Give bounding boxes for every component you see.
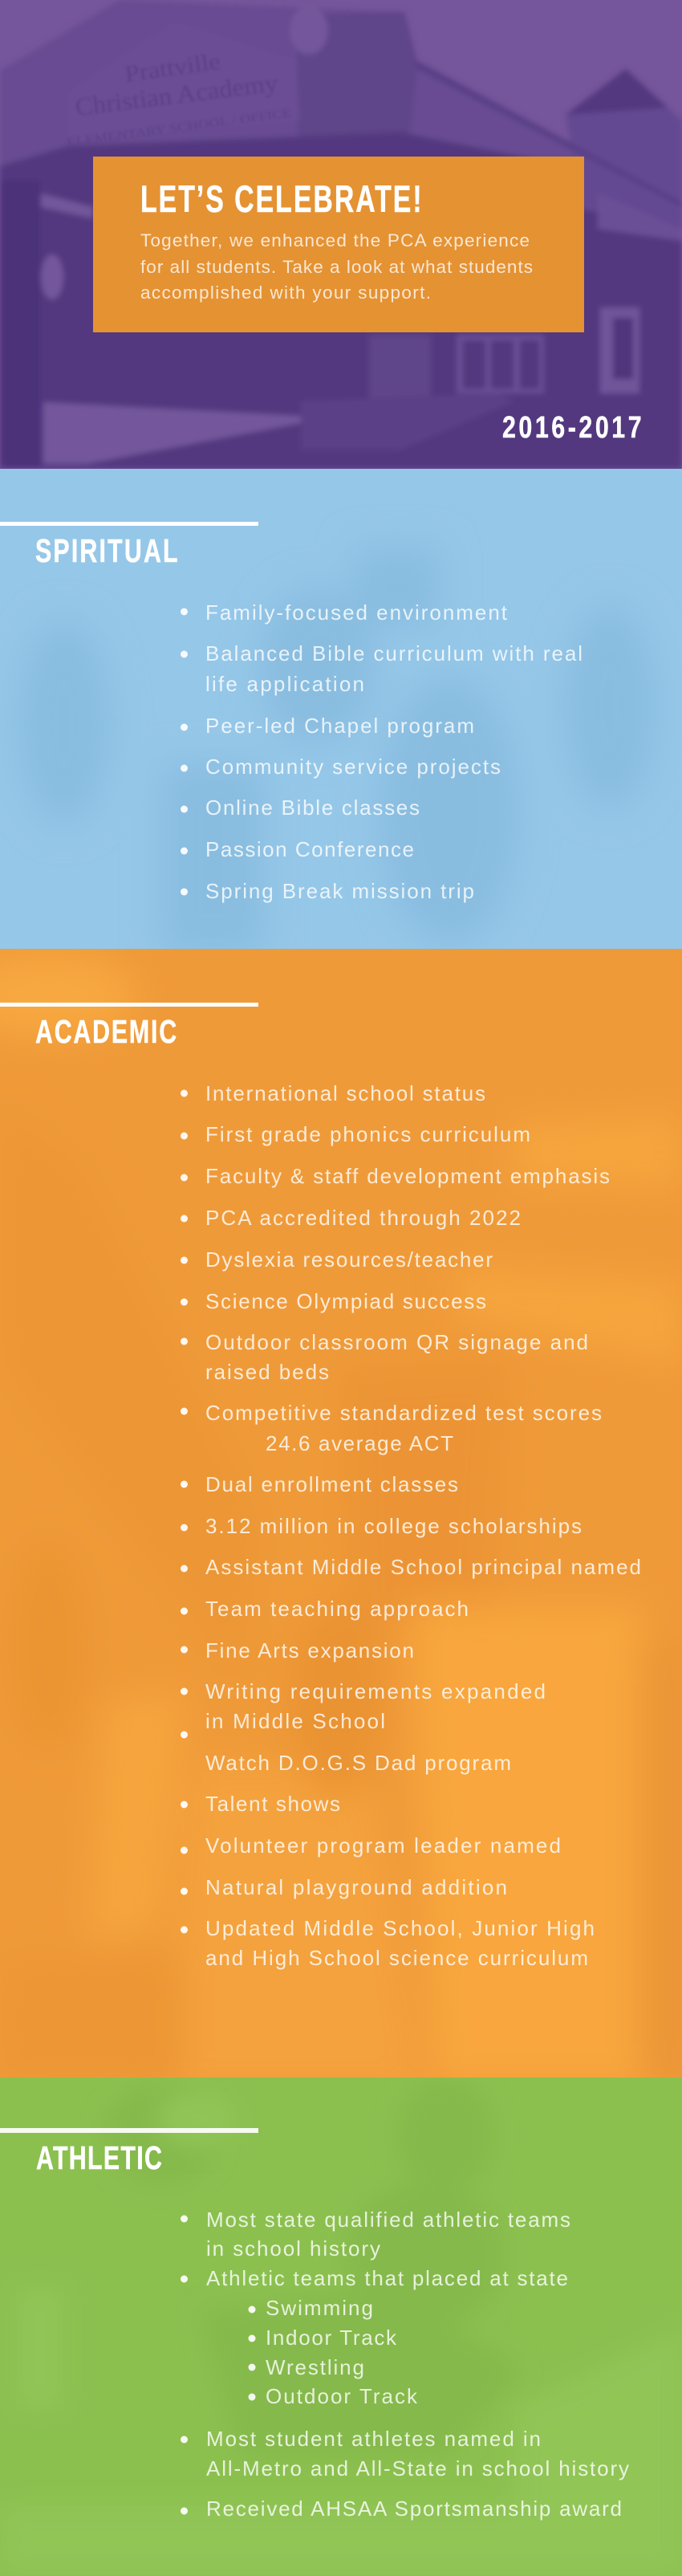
year label: 2016-2017	[502, 411, 642, 445]
list: spiritual items: Community service projects	[205, 755, 501, 779]
list: academic items: PCA accredited through 2022	[205, 1206, 521, 1230]
list: athletic items: Athletic teams that placed at state	[206, 2266, 568, 2290]
photo sign text	[69, 55, 286, 141]
list: academic items: Dyslexia resources/teacher	[205, 1247, 493, 1272]
photo sign text: ELEMENTARY SCHOOL / OFFICE	[66, 107, 292, 149]
photo: faded classroom in orange	[0, 955, 682, 2087]
panel: spiritual	[0, 469, 682, 955]
panel: athletic	[0, 2077, 682, 2576]
panel: academic	[0, 949, 682, 2087]
list: athletic items: in school history	[206, 2236, 380, 2261]
list: academic items: Dual enrollment classes	[205, 1472, 458, 1496]
list: academic items: 3.12 million in college scholarships	[205, 1514, 582, 1538]
photo sign text: Prattville	[124, 49, 222, 87]
list: spiritual items: Spring Break mission trip	[205, 879, 474, 903]
list: academic items: Natural playground addition	[205, 1875, 507, 1899]
photo: faded students in blue	[16, 546, 658, 955]
list: academic items	[181, 1081, 641, 1970]
list: academic items: Talent shows	[205, 1792, 340, 1816]
photo sign text: Christian Academy	[74, 68, 279, 121]
list: academic items: Assistant Middle School principal named	[205, 1555, 641, 1579]
panel: hero header	[0, 0, 682, 469]
list: academic items: Volunteer program leader named	[205, 1833, 561, 1858]
list: spiritual items: life application	[205, 672, 364, 696]
list: academic items: International school status	[205, 1081, 485, 1105]
callout: orange intro box	[93, 157, 584, 332]
list: academic items: Writing requirements expanded	[205, 1679, 546, 1703]
list: academic items: Team teaching approach	[205, 1597, 469, 1621]
intro text: Together, we enhanced the PCA experience	[140, 230, 530, 250]
list: athletic items: All-Metro and All-State in school history	[206, 2456, 629, 2480]
rule	[0, 2128, 258, 2133]
list: academic items: 24.6 average ACT	[266, 1431, 453, 1455]
photo: school building in purple duotone	[0, 0, 682, 469]
list: spiritual items: Balanced Bible curriculum with real	[205, 641, 583, 665]
list: academic items: Fine Arts expansion	[205, 1638, 414, 1662]
list: academic items: Updated Middle School, Junior High	[205, 1916, 595, 1940]
list: spiritual items	[181, 600, 583, 903]
list: athletic items: Indoor Track	[266, 2326, 397, 2350]
list: spiritual items: Peer-led Chapel program	[205, 714, 474, 738]
list: athletic items: Most state qualified athletic teams	[206, 2208, 570, 2232]
heading: spiritual: SPIRITUAL	[35, 531, 178, 569]
list: academic items: Outdoor classroom QR signage and	[205, 1330, 588, 1354]
list: academic items: Faculty & staff development emphasis	[205, 1164, 610, 1188]
intro text: accomplished with your support.	[140, 283, 431, 303]
heading: academic: ACADEMIC	[35, 1012, 177, 1050]
list: academic items: First grade phonics curriculum	[205, 1122, 530, 1146]
list: athletic items: Wrestling	[266, 2355, 364, 2379]
rule	[0, 1003, 258, 1007]
list: athletic items	[181, 2208, 629, 2521]
list: spiritual items: Passion Conference	[205, 837, 414, 861]
list: athletic items: Swimming	[266, 2296, 373, 2320]
list: athletic items: Most student athletes named in	[206, 2427, 541, 2451]
intro text	[140, 230, 533, 303]
list: academic items: Competitive standardized test scores	[205, 1401, 602, 1425]
photo: faded athletes in green	[16, 2309, 666, 2554]
rule	[0, 522, 258, 526]
intro text: for all students. Take a look at what students	[140, 257, 533, 277]
list: academic items: in Middle School	[205, 1709, 385, 1733]
list: academic items: raised beds	[205, 1360, 329, 1384]
list: academic items: Watch D.O.G.S Dad program	[205, 1751, 511, 1775]
list: spiritual items: Online Bible classes	[205, 796, 420, 820]
list: athletic items: Received AHSAA Sportsmanship award	[206, 2497, 622, 2521]
list: academic items: and High School science curriculum	[205, 1946, 588, 1970]
list: athletic items: Outdoor Track	[266, 2384, 418, 2408]
heading: let's celebrate: LET’S CELEBRATE!	[140, 178, 422, 220]
list: spiritual items: Family-focused environment	[205, 600, 508, 625]
list: academic items: Science Olympiad success	[205, 1289, 486, 1313]
heading: athletic: ATHLETIC	[36, 2139, 162, 2176]
